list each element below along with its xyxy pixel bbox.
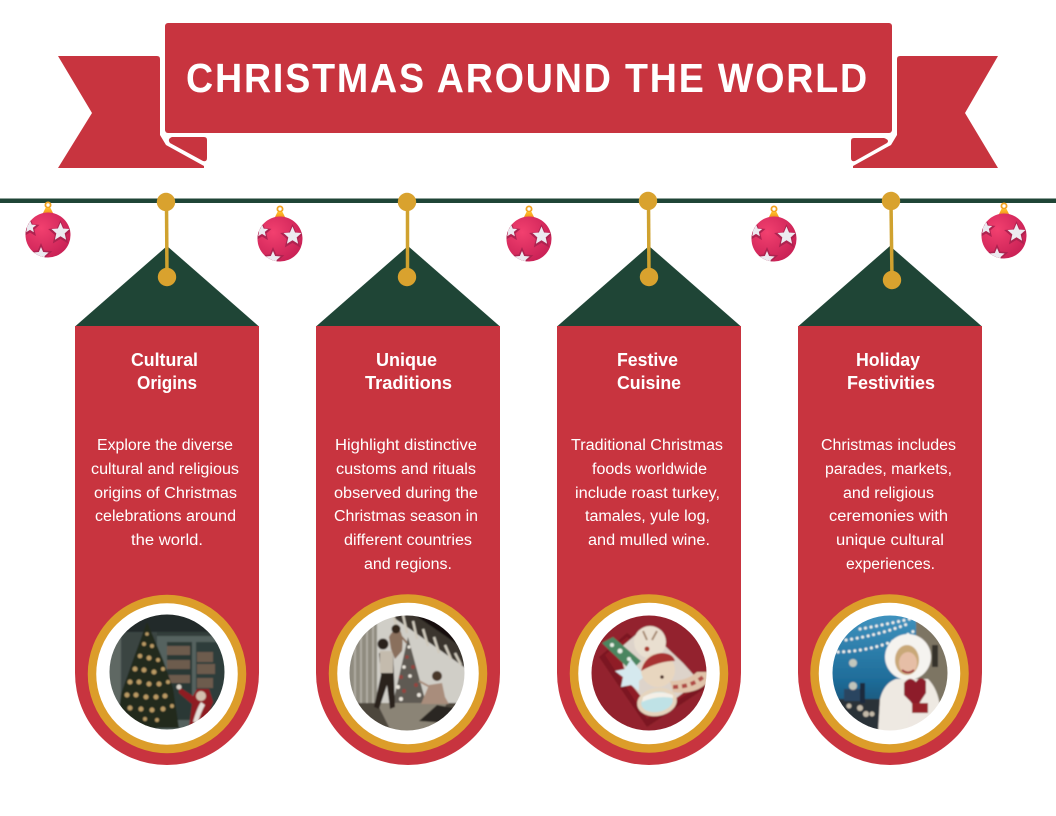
tag body (798, 326, 982, 765)
body text: unique cultural (836, 532, 944, 549)
body text (91, 437, 239, 549)
photo frame (574, 598, 724, 748)
ornament 2 (252, 206, 305, 269)
heading: Traditions (365, 373, 452, 393)
tag roof (798, 246, 982, 326)
tag roof (75, 246, 259, 326)
ribbon fold right (851, 138, 888, 161)
body text: celebrations around (95, 508, 236, 525)
heading: Festivities (847, 373, 935, 393)
heading (131, 350, 198, 393)
heading: Origins (137, 373, 197, 393)
photo frame (333, 598, 483, 748)
photo: christmas tree and santa (107, 612, 227, 732)
body text (571, 437, 723, 549)
panel: festive cuisine (557, 192, 741, 765)
photo frame (92, 599, 242, 749)
hanger (398, 193, 416, 286)
heading: Festive (617, 350, 678, 370)
body text (821, 437, 956, 573)
heading: Unique (376, 350, 437, 370)
ornaments row (20, 202, 1029, 269)
body text: customs and rituals (336, 461, 476, 478)
body text: cultural and religious (91, 461, 239, 478)
heading (365, 350, 452, 393)
body text: observed during the (334, 485, 478, 502)
ornament 4 (746, 206, 799, 269)
ornament 3 (502, 206, 554, 269)
body text: origins of Christmas (94, 485, 237, 502)
ribbon tail right (853, 56, 998, 168)
panel: cultural origins (75, 193, 259, 765)
photo: woman in white winter coat (830, 613, 950, 733)
hanger (639, 192, 658, 286)
body text: and religious (843, 485, 934, 502)
heading (847, 350, 935, 393)
tag roof (316, 246, 500, 326)
photo frame (814, 598, 964, 748)
garland line (0, 198, 1056, 203)
body text: ceremonies with (829, 508, 948, 525)
body text: experiences. (846, 556, 935, 573)
banner main panel (165, 23, 892, 133)
body text: Christmas includes (821, 437, 956, 454)
heading: Cultural (131, 350, 198, 370)
heading: Cuisine (617, 373, 681, 393)
title: CHRISTMAS AROUND THE WORLD (186, 55, 869, 101)
panel: unique traditions (316, 193, 500, 765)
body text: the world. (131, 532, 203, 549)
tag roof (557, 246, 741, 326)
banner: title ribbon (58, 23, 998, 168)
hanger (157, 193, 176, 286)
heading: Holiday (856, 350, 920, 370)
tag body (75, 326, 259, 765)
hanger (882, 192, 901, 289)
body text: Highlight distinctive (335, 437, 477, 454)
body text: foods worldwide (592, 461, 707, 478)
tag body (557, 326, 741, 765)
body text: parades, markets, (825, 461, 952, 478)
photo: family decorating a tree (347, 613, 467, 733)
ribbon tail left (58, 56, 204, 168)
body text: different countries (344, 532, 472, 549)
panel: holiday festivities (798, 192, 982, 765)
ribbon fold left (169, 137, 207, 161)
ornament 5 (976, 203, 1029, 266)
ornament 1 (20, 202, 73, 265)
body text (334, 437, 478, 573)
body text: tamales, yule log, (585, 508, 710, 525)
body text: and mulled wine. (588, 532, 710, 549)
photo: christmas cookies (589, 613, 709, 733)
body text: Explore the diverse (97, 437, 233, 454)
tag body (316, 326, 500, 765)
body text: Traditional Christmas (571, 437, 723, 454)
body text: include roast turkey, (575, 485, 720, 502)
body text: Christmas season in (334, 508, 478, 525)
body text: and regions. (364, 556, 452, 573)
heading (617, 350, 681, 393)
